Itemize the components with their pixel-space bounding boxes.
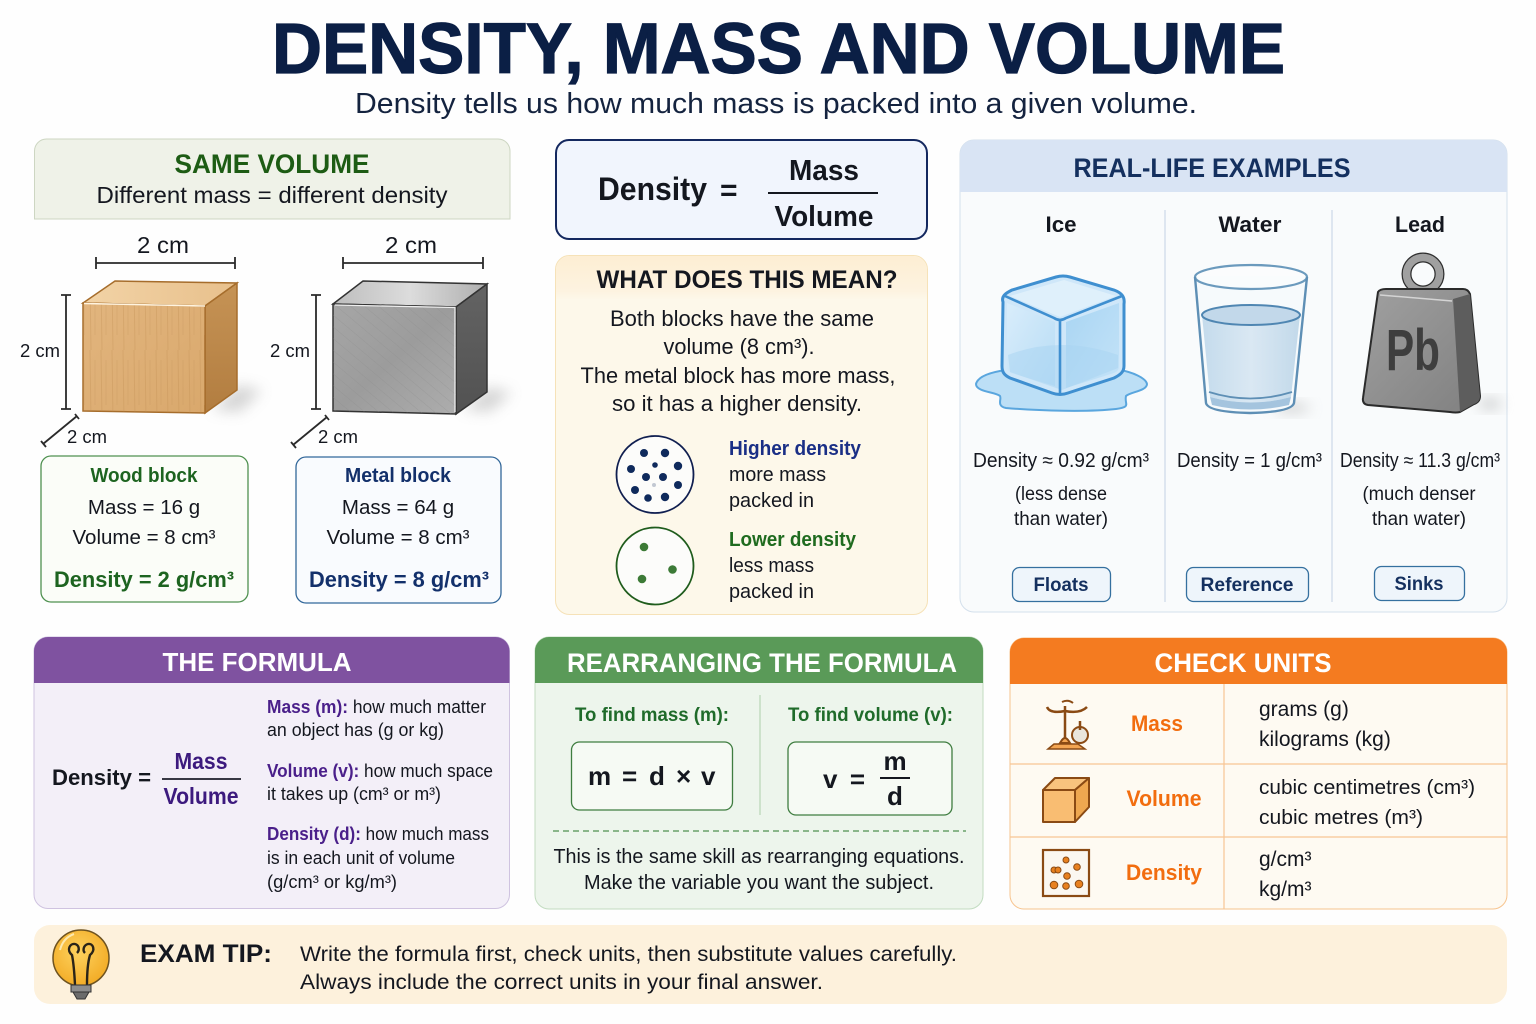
panel: what does this mean <box>556 256 928 614</box>
explanation text: so it has a higher density. <box>612 391 862 416</box>
wood block dimensions: 2 cm <box>67 427 107 447</box>
find mass column: To find mass (m): <box>575 704 729 726</box>
rearranging note <box>554 846 964 894</box>
what does this mean heading: WHAT DOES THIS MEAN? <box>596 266 898 294</box>
exam tip text: Write the formula first, check units, then substitute values carefully. <box>300 942 957 966</box>
panel: same volume <box>20 139 512 603</box>
reference badge <box>1186 568 1308 602</box>
units: volume: cubic metres (m³) <box>1259 806 1423 829</box>
exam tip text <box>300 942 957 994</box>
title: DENSITY, MASS AND VOLUME <box>272 10 1285 89</box>
ice density text <box>973 450 1149 530</box>
column headings <box>1046 212 1445 237</box>
units: density: g/cm³ <box>1259 848 1312 871</box>
panel: real-life examples <box>960 140 1507 612</box>
metal block illustration <box>333 281 512 414</box>
explanation text <box>580 306 896 416</box>
find mass column: v <box>701 761 716 791</box>
ice density text: (less dense <box>1015 483 1107 505</box>
lead density text: (much denser <box>1362 483 1476 505</box>
check units heading: CHECK UNITS <box>1154 648 1332 678</box>
icon: glass of water <box>1195 265 1310 413</box>
formula fraction <box>52 748 241 809</box>
wood block dimensions <box>20 232 235 447</box>
sinks badge: Sinks <box>1394 573 1444 595</box>
rearranging note: This is the same skill as rearranging equations. <box>554 846 964 868</box>
units: mass <box>1259 698 1391 751</box>
explanation text: Both blocks have the same <box>610 306 874 331</box>
column headings: Water <box>1218 212 1282 237</box>
icon: density box <box>1043 850 1089 896</box>
explanation text: The metal block has more mass, <box>580 363 896 388</box>
metal block dimensions: 2 cm <box>385 232 437 258</box>
definition: mass <box>267 697 486 740</box>
find mass column: d <box>649 761 665 791</box>
ice density text: Density ≈ 0.92 g/cm³ <box>973 450 1149 472</box>
formula fraction: Mass <box>174 748 228 774</box>
label: density: Density <box>1126 860 1203 885</box>
label: mass: Mass <box>1131 711 1183 736</box>
metal block card <box>296 457 501 603</box>
icon: higher density particles <box>616 436 694 513</box>
find mass column <box>572 704 732 810</box>
formula box <box>556 140 927 239</box>
water density text: Density = 1 g/cm³ <box>1177 450 1322 472</box>
wood block card: Mass = 16 g <box>88 496 200 519</box>
icon: lightbulb <box>53 930 109 999</box>
real-life examples heading: REAL-LIFE EXAMPLES <box>1074 153 1350 183</box>
units: density: kg/m³ <box>1259 878 1312 901</box>
wood block card: Wood block <box>90 465 198 487</box>
find volume column: v = <box>823 764 865 794</box>
rearranging heading: REARRANGING THE FORMULA <box>567 648 957 678</box>
exam tip label: EXAM TIP: <box>140 940 272 968</box>
icon: balance scale <box>1047 701 1088 749</box>
formula box: Density <box>598 171 707 207</box>
higher density label: Higher density <box>729 438 862 460</box>
definition: mass: an object has (g or kg) <box>267 720 444 740</box>
lower density label: packed in <box>729 581 814 603</box>
rearranging note: Make the variable you want the subject. <box>584 872 934 894</box>
metal block card: Volume = 8 cm³ <box>326 526 470 549</box>
lead density text: than water) <box>1372 508 1466 530</box>
find volume column: m <box>883 746 907 776</box>
find volume column: To find volume (v): <box>788 704 953 726</box>
units: mass: grams (g) <box>1259 698 1349 721</box>
icon: volume cube <box>1043 778 1089 822</box>
panel: the formula <box>34 637 510 908</box>
wood block card: Volume = 8 cm³ <box>72 526 216 549</box>
metal block dimensions: 2 cm <box>270 341 310 361</box>
formula fraction: Volume <box>164 783 238 809</box>
same volume header: Different mass = different density <box>96 182 448 208</box>
find mass column: = <box>622 761 637 791</box>
panel: check units <box>1010 638 1507 909</box>
definition: volume: Volume (v): how much space <box>267 761 493 781</box>
same volume header <box>34 139 510 219</box>
find volume column: d <box>887 781 903 811</box>
units: density <box>1259 848 1312 901</box>
find mass column: × <box>676 761 691 791</box>
units: volume <box>1259 776 1475 829</box>
definition: density <box>267 824 489 892</box>
subtitle: Density tells us how much mass is packed into a given volume. <box>355 88 1197 120</box>
definition: density: is in each unit of volume <box>267 848 455 868</box>
reference badge: Reference <box>1200 574 1294 596</box>
same volume header: SAME VOLUME <box>174 149 370 179</box>
definition: mass: Mass (m): how much matter <box>267 697 486 717</box>
definition: volume: it takes up (cm³ or m³) <box>267 784 441 804</box>
icon: ice cube <box>976 276 1147 411</box>
label: volume: Volume <box>1126 786 1202 811</box>
formula box: Mass <box>789 155 859 187</box>
units: mass: kilograms (kg) <box>1259 728 1391 751</box>
formula fraction: Density = <box>52 765 151 790</box>
panel: rearranging the formula <box>535 637 983 909</box>
definition: volume <box>267 761 493 804</box>
icon: lead weight: Pb <box>1386 318 1440 383</box>
find mass column: m <box>588 761 611 791</box>
metal block card: Density = 8 g/cm³ <box>309 567 489 592</box>
wood block card: Density = 2 g/cm³ <box>54 567 234 592</box>
icon: lead weight <box>1363 258 1502 412</box>
lead density text <box>1340 450 1500 530</box>
units: volume: cubic centimetres (cm³) <box>1259 776 1475 799</box>
definition: density: (g/cm³ or kg/m³) <box>267 872 397 892</box>
lead density text: Density ≈ 11.3 g/cm³ <box>1340 450 1500 472</box>
sinks badge <box>1374 566 1464 600</box>
metal block card: Mass = 64 g <box>342 496 454 519</box>
metal block dimensions: 2 cm <box>318 427 358 447</box>
column headings: Lead <box>1395 212 1445 237</box>
floats badge: Floats <box>1034 574 1089 596</box>
icon: lower density particles <box>616 528 694 604</box>
formula box: Volume <box>774 201 874 233</box>
wood block illustration <box>83 281 262 413</box>
wood block dimensions: 2 cm <box>137 232 189 258</box>
higher density label <box>729 438 862 512</box>
the formula heading: THE FORMULA <box>162 647 352 677</box>
column headings: Ice <box>1046 212 1076 237</box>
metal block dimensions <box>270 232 483 448</box>
floats badge <box>1012 568 1110 602</box>
lower density label: Lower density <box>729 529 857 551</box>
formula box: = <box>720 174 738 207</box>
lower density label <box>729 529 857 603</box>
lower density label: less mass <box>729 555 814 577</box>
definition: density: Density (d): how much mass <box>267 824 489 844</box>
explanation text: volume (8 cm³). <box>664 334 814 359</box>
ice density text: than water) <box>1014 508 1108 530</box>
panel: exam tip <box>34 925 1507 1004</box>
metal block card: Metal block <box>345 465 452 487</box>
higher density label: packed in <box>729 490 814 512</box>
wood block card <box>41 456 248 602</box>
higher density label: more mass <box>729 464 826 486</box>
exam tip text: Always include the correct units in your final answer. <box>300 970 823 994</box>
wood block dimensions: 2 cm <box>20 341 60 361</box>
find volume column <box>788 704 953 815</box>
